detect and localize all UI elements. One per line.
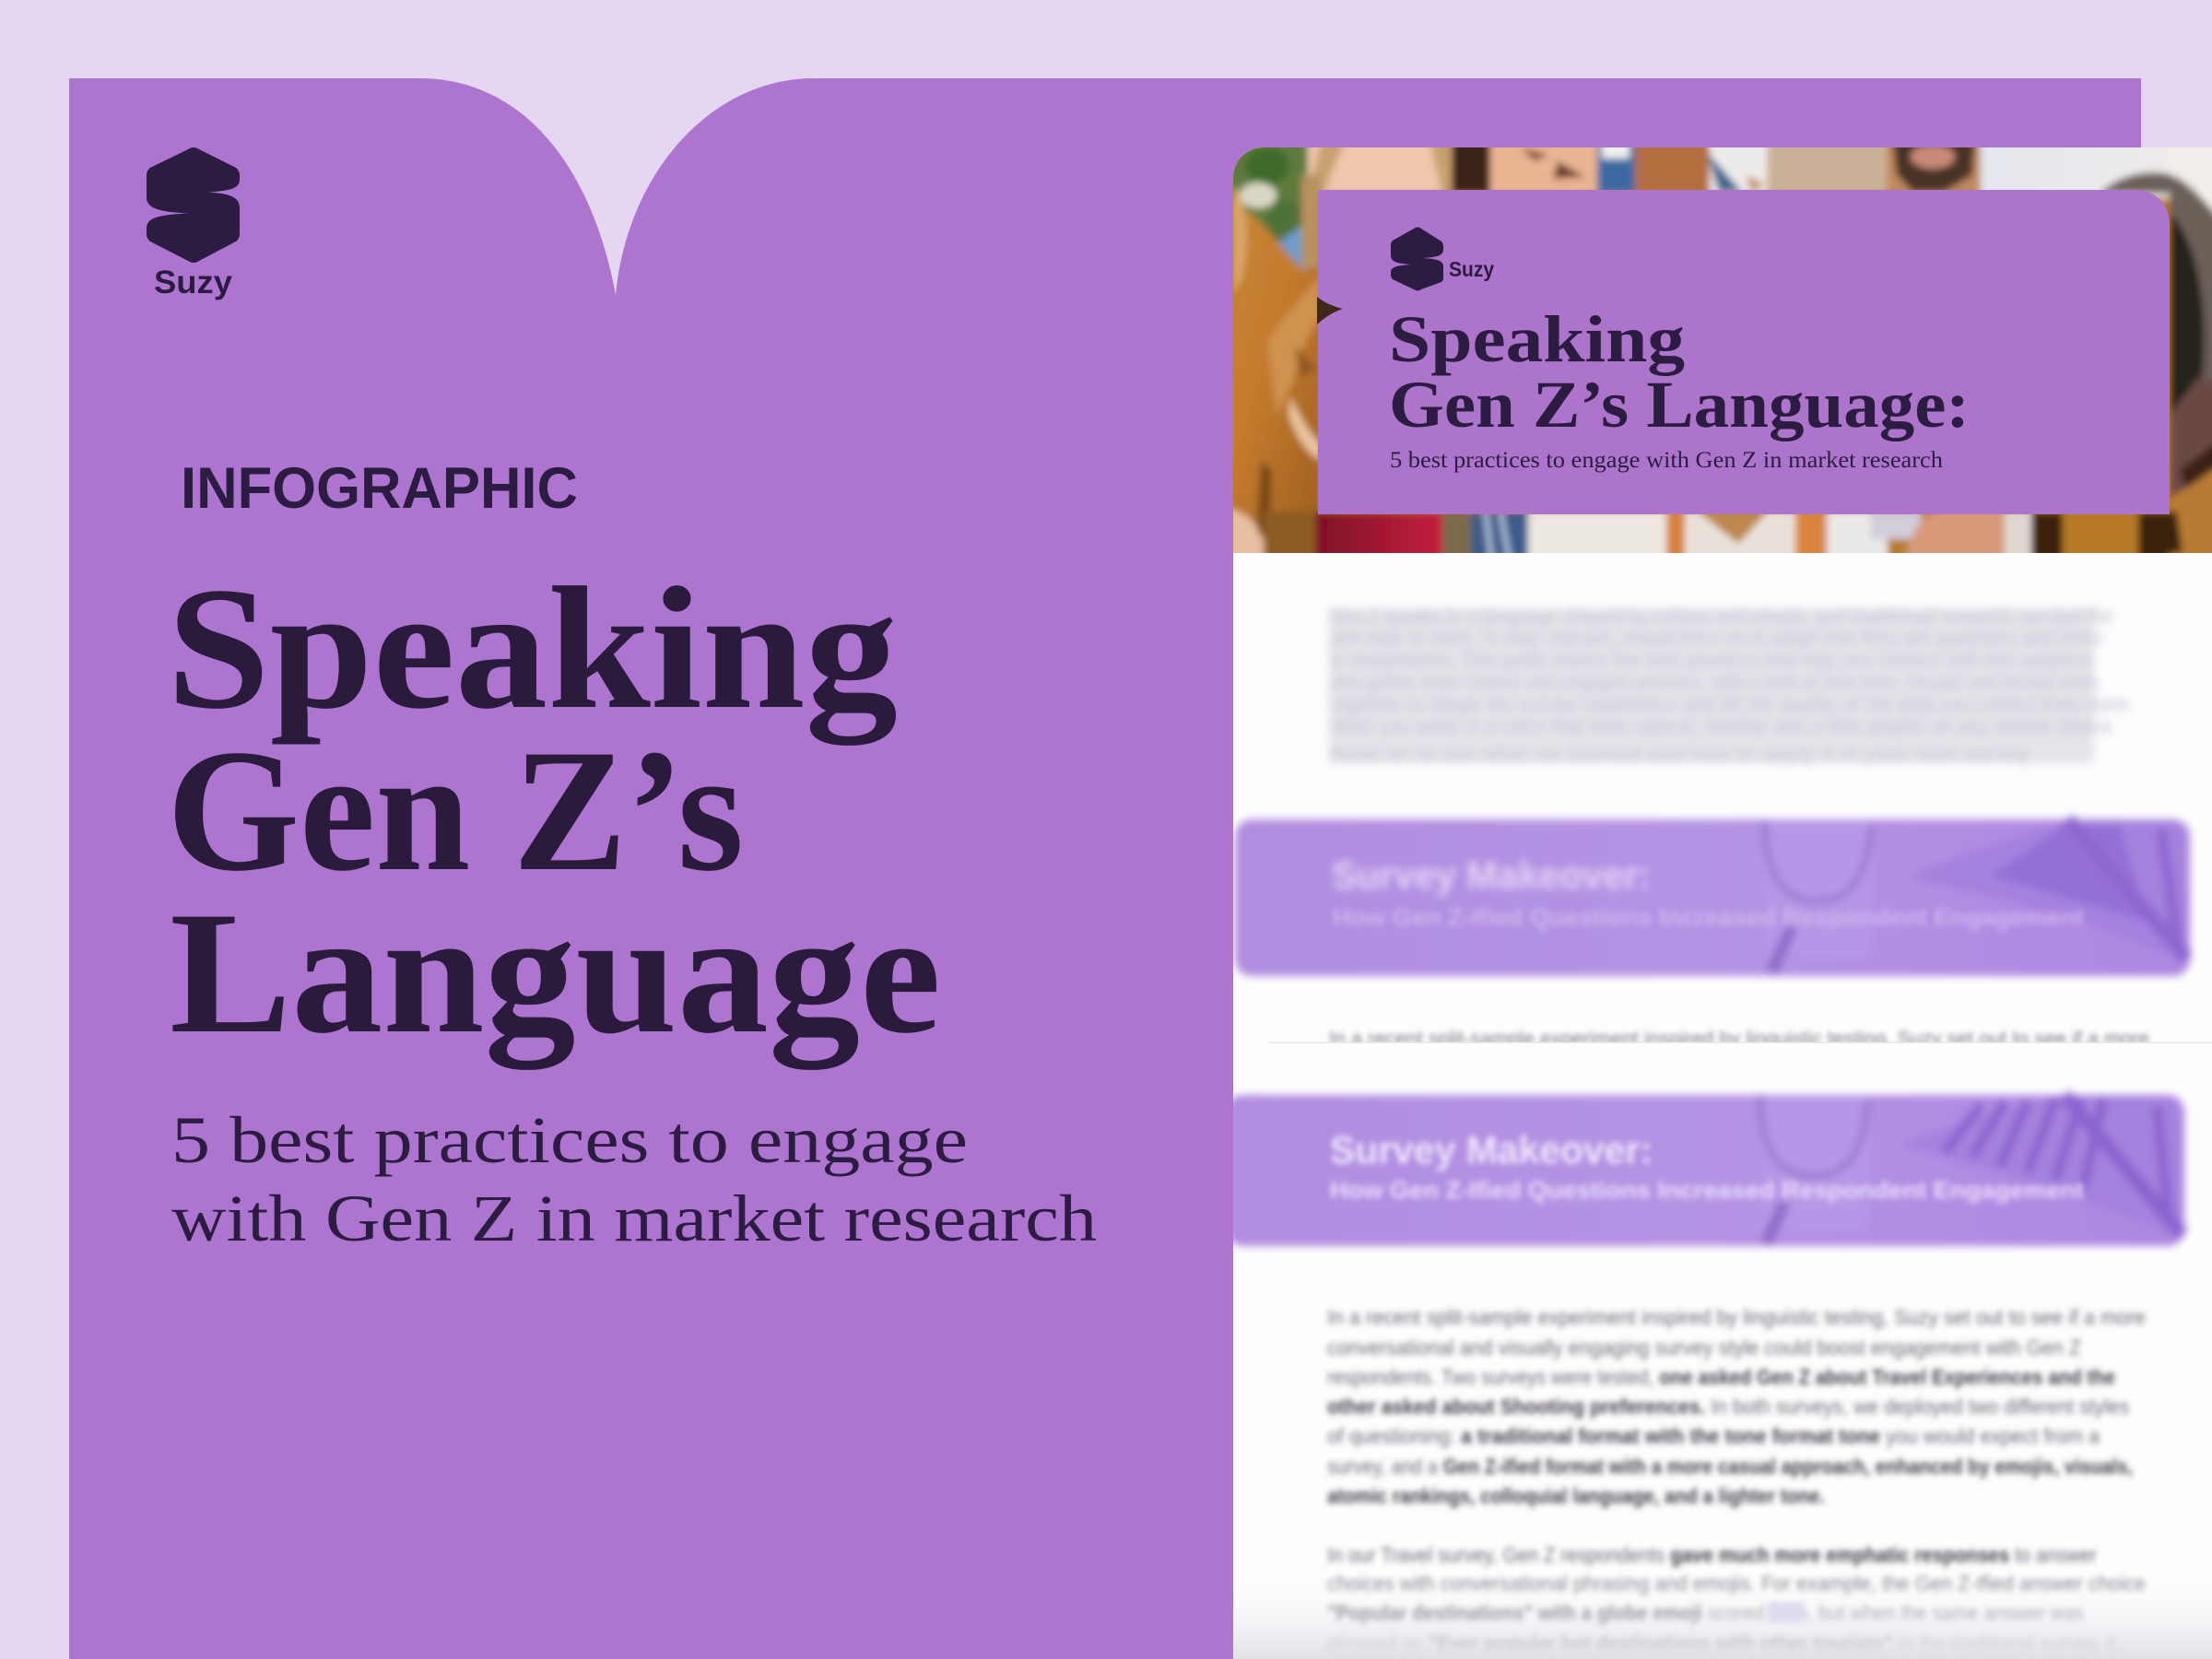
text block: blurred body paragraph 1 bbox=[1327, 1305, 2146, 1508]
text block: blurred body paragraph 1: In a recent split-sample experiment inspired by linguistic testing, Suzy set out to see if a more bbox=[1327, 1305, 2146, 1329]
logo: Suzy bbox=[147, 147, 240, 300]
main title: Gen Z’s bbox=[167, 714, 744, 908]
card title bbox=[1392, 315, 1963, 441]
card title: Gen Z’s Language: bbox=[1389, 368, 1970, 441]
card subtitle: 5 best practices to engage with Gen Z in market research bbox=[1390, 448, 1944, 473]
banner title: Survey Makeover: bbox=[1332, 853, 1651, 897]
hand left bbox=[1233, 503, 1270, 553]
logo wordmark: Suzy bbox=[154, 265, 233, 300]
clipped text line: In a recent split-sample experiment inspired by linguistic testing, Suzy set out to see if a more bbox=[1329, 1027, 2149, 1050]
photo bottom edge bbox=[1233, 553, 2212, 571]
main title: Language bbox=[170, 877, 941, 1070]
eyebrow label: INFOGRAPHIC bbox=[181, 456, 578, 521]
top row bbox=[1301, 147, 1447, 190]
text block: blurred intro: Read on to see what we learned and how to apply it in your next survey bbox=[1329, 742, 2030, 767]
text block: blurred body paragraph 2: "Popular destinations" with a globe emoji scored 54%, but when the same answer was bbox=[1327, 1601, 2084, 1625]
bottom row bbox=[1259, 509, 1324, 553]
subtitle: with Gen Z in market research bbox=[171, 1182, 1097, 1255]
icon: Suzy S mark bbox=[147, 147, 240, 263]
banner artwork bbox=[1762, 819, 2187, 972]
highlight: link stat bbox=[1767, 1602, 1804, 1624]
photo detail overlapping card bbox=[1317, 297, 1343, 324]
text block: blurred body paragraph 1: atomic rankings, colloquial language, and a lighter tone. bbox=[1327, 1484, 1825, 1508]
photo: group of young people bbox=[1233, 147, 2212, 553]
panel: document header card bbox=[1317, 190, 2170, 514]
logo: small Suzy: Suzy bbox=[1449, 257, 1494, 281]
banner: survey makeover sharp bbox=[1226, 1095, 2184, 1246]
logo: small Suzy bbox=[1391, 227, 1494, 291]
text block: blurred body paragraph 1: survey, and a Gen Z-ified format with a more casual approach, enhanced by emojis, visuals, bbox=[1327, 1454, 2133, 1478]
text block: blurred body paragraph 2 bbox=[1327, 1543, 2146, 1655]
card title: Speaking bbox=[1389, 302, 1685, 376]
text block: blurred body paragraph 1: other asked about Shooting preferences. In both surveys, we deployed two different styles bbox=[1327, 1394, 2129, 1418]
panel: document preview bbox=[1207, 120, 2212, 1659]
text block: blurred body paragraph 2: choices with conversational phrasing and emojis. For example, the Gen Z-Ified answer choice bbox=[1327, 1571, 2146, 1595]
blue shirt bbox=[1272, 226, 1316, 276]
text block: blurred body paragraph 1: conversational and visually engaging survey style could boost engagement with Gen Z bbox=[1327, 1335, 2081, 1359]
jacket bbox=[1233, 197, 1326, 520]
foliage bbox=[1233, 147, 1312, 230]
text block: blurred intro bbox=[1328, 604, 2129, 767]
subtitle bbox=[171, 1103, 1097, 1255]
text block: blurred body paragraph 2: In our Travel survey, Gen Z respondents gave much more emphatic responses to answer bbox=[1327, 1543, 2097, 1567]
main title: Speaking bbox=[167, 552, 898, 746]
banner subtitle: How Gen Z-Ified Questions Increased Respondent Engagement bbox=[1330, 1176, 2084, 1204]
subtitle: 5 best practices to engage bbox=[171, 1103, 968, 1177]
banner: survey makeover faded bbox=[1235, 819, 2190, 976]
banner subtitle: How Gen Z-Ified Questions Increased Respondent Engagement bbox=[1333, 903, 2084, 931]
bottom fade bbox=[1233, 1581, 2212, 1659]
sky bbox=[1973, 147, 2175, 206]
main title bbox=[167, 552, 941, 1070]
text block: blurred body paragraph 1: of questioning: a traditional format with the tone format tone you would expect from a bbox=[1327, 1424, 2100, 1448]
text block: blurred body paragraph 1: respondents. Two surveys were tested, one asked Gen Z about Travel Experiences and the bbox=[1327, 1365, 2115, 1389]
banner artwork bbox=[1759, 1095, 2183, 1244]
shirt right bbox=[2166, 470, 2212, 553]
text block: blurred body paragraph 2: phrased as "Ever popular hot destinations with other tourists" in the traditional survey, it bbox=[1327, 1631, 2117, 1655]
long hair right bbox=[2099, 168, 2212, 386]
banner title: Survey Makeover: bbox=[1330, 1128, 1653, 1171]
